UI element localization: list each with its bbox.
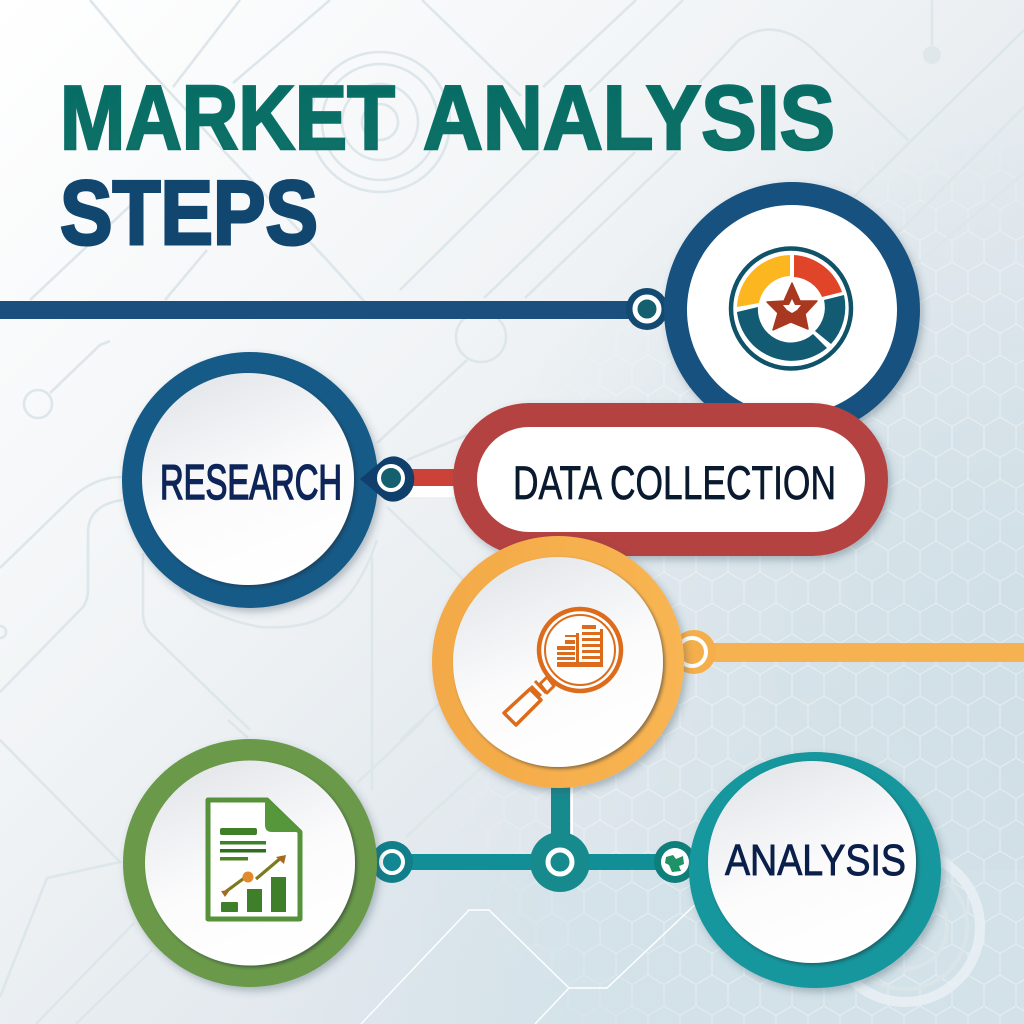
- label: RESEARCH: [160, 456, 342, 510]
- step pill: data collection: [453, 403, 888, 556]
- title: [60, 68, 835, 264]
- connector: red link: [400, 469, 470, 497]
- step circle: analysis tool: [432, 536, 684, 788]
- title line 1: market: MARKET: [60, 68, 395, 169]
- node: right: [654, 841, 696, 883]
- connector: blue line: [0, 288, 668, 330]
- label: DATA COLLECTION: [513, 456, 836, 509]
- step circle: analysis: [689, 752, 941, 988]
- step circle: strategy: [664, 182, 920, 438]
- label: ANALYSIS: [725, 836, 906, 885]
- icon: document with chart: [208, 798, 302, 919]
- icon: magnifier with chart: [504, 609, 621, 725]
- connector: teal lines: [371, 780, 696, 892]
- step circle: research: [122, 352, 378, 608]
- node: middle: [530, 832, 590, 892]
- connector node: research: [360, 456, 414, 502]
- node: left: [371, 841, 413, 883]
- title line 2: STEPS: [60, 163, 318, 264]
- icon: pie chart with star: [731, 248, 851, 368]
- title line 1: analysis: ANALYSIS: [423, 68, 835, 169]
- connector: orange line: [672, 630, 1024, 674]
- step circle: report: [123, 739, 377, 987]
